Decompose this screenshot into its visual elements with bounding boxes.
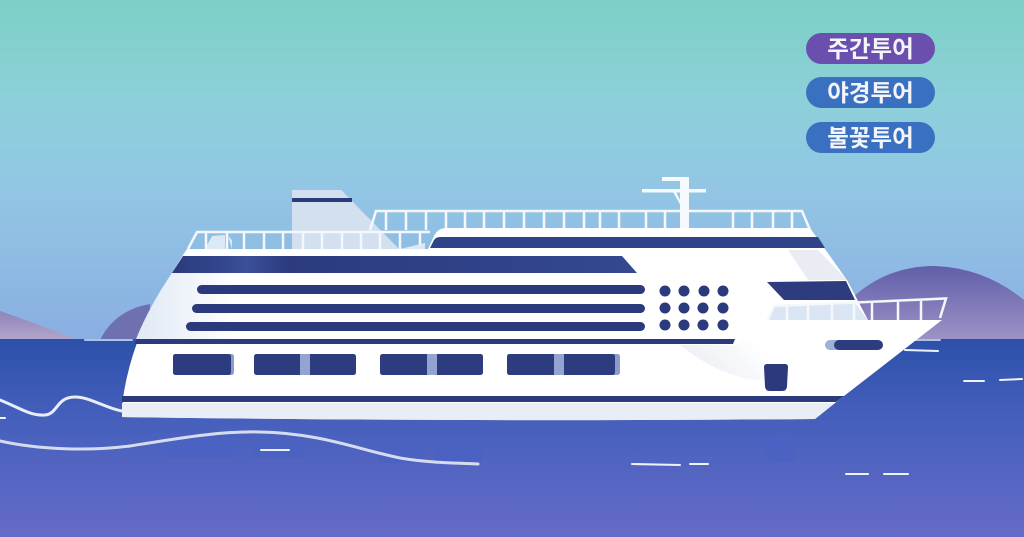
lower deck railing: [188, 232, 430, 249]
bridge windows band: [430, 237, 825, 248]
navy waterline stripe: [122, 396, 844, 402]
cruise ship: [122, 177, 946, 420]
badge: fireworks tour: 불꽃투어: [827, 125, 914, 151]
hawse window: [825, 340, 883, 350]
badge: day tour: 주간투어: [827, 36, 914, 62]
hull body: [122, 228, 942, 420]
balcony stripes: [186, 285, 645, 331]
promenade windows band: [172, 256, 637, 273]
badge: night tour: 야경투어: [827, 80, 914, 106]
bow railing: [767, 298, 946, 320]
small left hill behind stern: [100, 304, 150, 340]
lower deck windows: [173, 354, 620, 375]
mast: [642, 177, 706, 229]
tour badges: [806, 33, 935, 153]
lower hull band: [122, 403, 835, 420]
right purple hill: [850, 266, 1024, 342]
stern wake wave: [0, 397, 122, 415]
left distant hill: [0, 311, 78, 340]
water highlight dashes: [0, 340, 1022, 474]
stern upper shading: [136, 273, 240, 339]
porthole grid: [660, 286, 728, 330]
long wave below hull: [0, 432, 478, 464]
upper deck railing: [370, 211, 810, 230]
main deck stripe: [135, 339, 735, 344]
bow shading: [680, 322, 868, 381]
bridge windshield: [767, 281, 855, 300]
sea: [0, 339, 1024, 537]
water reflections under the ship: [168, 437, 796, 463]
wake waves: [0, 397, 478, 464]
sky background: [0, 0, 1024, 342]
anchor pocket: [764, 364, 788, 391]
funnel: [292, 190, 400, 250]
